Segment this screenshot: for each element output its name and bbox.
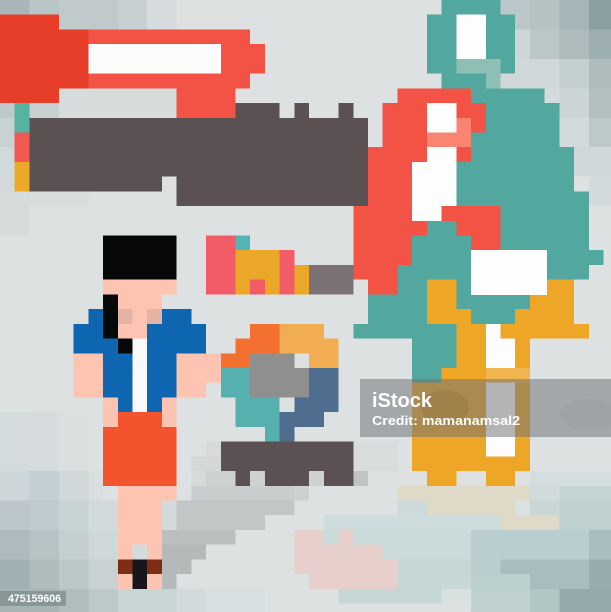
shadow: pink hand: [294, 530, 397, 589]
head: [427, 0, 515, 88]
shadow: woman: [162, 442, 397, 589]
watermark: [360, 379, 611, 437]
dark grey block: [29, 103, 368, 206]
ponytail: [103, 294, 132, 353]
skirt: [103, 412, 177, 486]
white panels: [486, 324, 515, 456]
face: [103, 280, 177, 339]
colour strip: [15, 103, 29, 191]
small bar chart: [206, 236, 353, 294]
arms: [74, 353, 221, 427]
head window: [456, 15, 486, 59]
teal figure: [353, 0, 604, 383]
jacket: [74, 309, 206, 412]
orange highlight: [486, 368, 530, 383]
neck highlight: [456, 59, 500, 88]
blush: [118, 309, 162, 324]
hair: [103, 236, 177, 280]
dark base bar: [221, 442, 353, 486]
white label: [471, 250, 547, 295]
image id tag: [0, 591, 66, 606]
red banner with white label: [0, 15, 265, 118]
shoes: [118, 559, 162, 574]
salmon highlight: [427, 118, 471, 147]
watermark credit: Credit: mamanamsal2: [372, 413, 520, 428]
red figure: [353, 88, 500, 294]
white panels: [412, 103, 456, 221]
orange figure: [412, 280, 589, 486]
ring chart: [221, 324, 339, 442]
body: [353, 88, 604, 383]
woman figure: [74, 236, 221, 589]
image id tag: 475159606: [8, 593, 61, 605]
legs: [118, 486, 177, 589]
watermark logo: iStock: [372, 390, 433, 412]
shadow: beige: [397, 486, 559, 530]
watermark band: [360, 379, 611, 437]
leg gap: [132, 545, 147, 559]
shirt: [132, 339, 147, 412]
watermark shading: [421, 390, 611, 431]
